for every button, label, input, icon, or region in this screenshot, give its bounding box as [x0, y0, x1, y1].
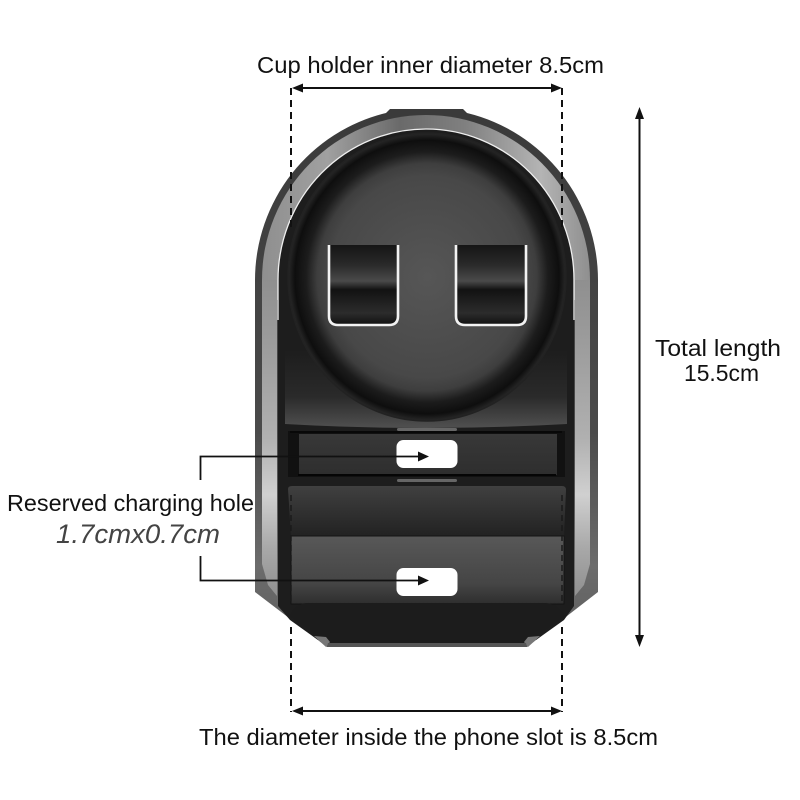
body outer shell [255, 109, 598, 647]
label: phone slot diameter: The diameter inside the phone slot is 8.5cm [199, 724, 658, 750]
right corner tab [524, 636, 540, 647]
left corner tab [314, 636, 330, 647]
lower phone slot panel [291, 536, 564, 604]
arrow: total length [635, 107, 644, 647]
right clip slot [456, 245, 526, 325]
lower charging hole [396, 568, 458, 596]
product: cup holder body [255, 109, 598, 647]
bottom edge [327, 643, 527, 647]
dashed guide: left [290, 88, 292, 712]
label: reserved charging hole: Reserved charging hole [7, 490, 254, 516]
upper charging hole [396, 440, 458, 468]
metal side highlight left [262, 280, 277, 596]
metal band [262, 115, 590, 300]
front lip [290, 603, 565, 643]
inner dark body [278, 129, 574, 640]
dashed guide: right [561, 88, 563, 712]
label: total length: Total length [655, 335, 781, 361]
arrow: upper charging hole callout [200, 452, 429, 480]
divider step [288, 486, 566, 536]
arrow: cup holder width [292, 84, 562, 92]
label: charging hole size: 1.7cmx0.7cm [56, 519, 220, 549]
faint seams on slot [291, 495, 562, 602]
metal side highlight right [575, 280, 590, 596]
label: cup holder inner diameter: Cup holder inner diameter 8.5cm [257, 52, 604, 78]
lower shoulder below cup [285, 350, 567, 428]
label: total length value: 15.5cm [684, 360, 759, 386]
arrow: lower charging hole callout [200, 556, 429, 586]
white rim line [278, 129, 574, 320]
upper phone slot panel [288, 428, 565, 482]
cup well [288, 133, 566, 421]
left clip slot [329, 245, 398, 325]
arrow: phone slot width [292, 706, 562, 716]
